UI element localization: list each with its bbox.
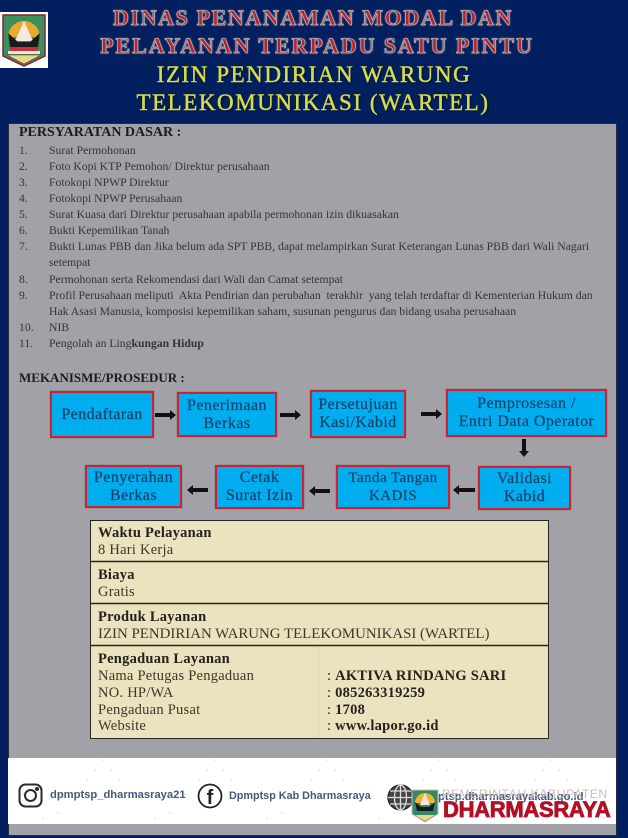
website address: ptsp.dharmasrayakab.go.id [438,791,583,803]
service product: IZIN PENDIRIAN WARUNG TELEKOMUNIKASI (WARTEL) [98,626,489,642]
service info table [90,520,549,739]
cost [98,567,135,600]
watermark: regency name: DHARMASRAYA [443,797,610,822]
requirements list: Surat Kuasa dari Direktur perusahaan apabila permohonan izin dikuasakan [49,208,399,221]
icon: instagram [18,784,42,808]
complaints: Nama Petugas Pengaduan [98,668,254,684]
cost: Biaya [98,567,135,583]
requirements list: Hak Asasi Manusia, komposisi kepemilikan saham, susunan pengurus dan bidang usaha perusahaan [49,305,516,318]
flow chart: Tanda Tangan [348,470,438,486]
complaints: : 085263319259 [327,685,425,701]
flow chart: Surat Izin [226,487,293,504]
service time: 8 Hari Kerja [98,542,173,558]
requirements list: 6. [19,224,28,237]
table dividers [91,560,548,738]
complaints: Pengaduan Pusat [98,702,200,718]
instagram handle: dpmptsp_dharmasraya21 [50,789,186,801]
flow chart: Kabid [504,488,545,505]
requirements list: 4. [19,192,28,205]
service time: Waktu Pelayanan [98,525,212,541]
complaints: NO. HP/WA [98,685,174,701]
complaints: : 1708 [327,702,365,718]
complaints [98,651,506,734]
requirements list: Fotokopi NPWP Direktur [49,176,169,189]
complaints: : AKTIVA RINDANG SARI [327,668,506,684]
footer strip [8,758,616,824]
flow chart: Penyerahan [94,468,173,486]
flow chart [50,388,608,510]
title: permit name: IZIN PENDIRIAN WARUNG [157,62,471,87]
requirements list: 5. [19,208,28,221]
cost: Gratis [98,584,135,600]
requirements list: Surat Permohonan [49,144,136,157]
requirements list: Permohonan serta Rekomendasi dari Wali dan Camat setempat [49,273,343,286]
complaints: Website [98,718,146,734]
watermark: regency logo [412,790,438,822]
service product [98,609,489,642]
title: agency name line 2: PELAYANAN TERPADU SATU PINTU [100,33,534,58]
requirements list: 2. [19,160,28,173]
flow chart: KADIS [369,488,417,504]
heading: mechanism: MEKANISME/PROSEDUR : [19,370,185,385]
requirements list: Profil Perusahaan meliputi Akta Pendirian dan perubahan terakhir yang telah terdaftar di Kementerian Hukum dan [49,289,593,302]
requirements list: NIB [49,321,69,334]
flow chart: Penerimaan [187,396,267,414]
requirements list: Fotokopi NPWP Perusahaan [49,192,182,205]
requirements list: 10. [19,321,34,334]
title: agency name: DINAS PENANAMAN MODAL DAN [113,5,513,30]
flow chart: Berkas [110,486,157,504]
requirements list [19,144,593,350]
requirements list: setempat [49,256,91,269]
complaints: : www.lapor.go.id [327,718,439,734]
heading: basic requirements: PERSYARATAN DASAR : [19,125,181,140]
requirements list: Foto Kopi KTP Pemohon/ Direktur perusahaan [49,160,270,173]
watermark: regency label: PEMERINTAH KABUPATEN [442,787,608,801]
emblem: regency logo [0,12,48,68]
requirements list: Pengolah an Lingkungan Hidup [49,337,204,350]
requirements list: 7. [19,240,28,253]
flow chart: Persetujuan [318,396,398,413]
flow chart: Berkas [203,414,251,432]
requirements list: 8. [19,273,28,286]
requirements list: 11. [19,337,33,350]
flow chart: Entri Data Operator [459,413,594,430]
icon: globe [387,784,412,811]
facebook handle: Dpmptsp Kab Dharmasraya [229,790,371,802]
icon: facebook [198,784,222,809]
title: permit name line 2: TELEKOMUNIKASI (WARTEL) [136,90,490,115]
service time [98,525,212,558]
flow chart: Validasi [497,470,552,487]
icon: facebook: f [207,787,214,809]
flow chart: Pendaftaran [61,406,143,422]
requirements list: Bukti Kepemilikan Tanah [49,224,169,237]
service product: Produk Layanan [98,609,206,625]
flow chart: Pemprosesan / [477,395,576,412]
flow chart: Kasi/Kabid [319,414,397,431]
requirements list: 9. [19,289,28,302]
flow chart: Cetak [240,469,279,486]
requirements list: 3. [19,176,28,189]
requirements list: Bukti Lunas PBB dan Jika belum ada SPT PBB, dapat melampirkan Surat Keterangan Lunas PBB dari Wali Nagari [49,240,589,253]
requirements list: 1. [19,144,28,157]
complaints: Pengaduan Layanan [98,651,230,667]
